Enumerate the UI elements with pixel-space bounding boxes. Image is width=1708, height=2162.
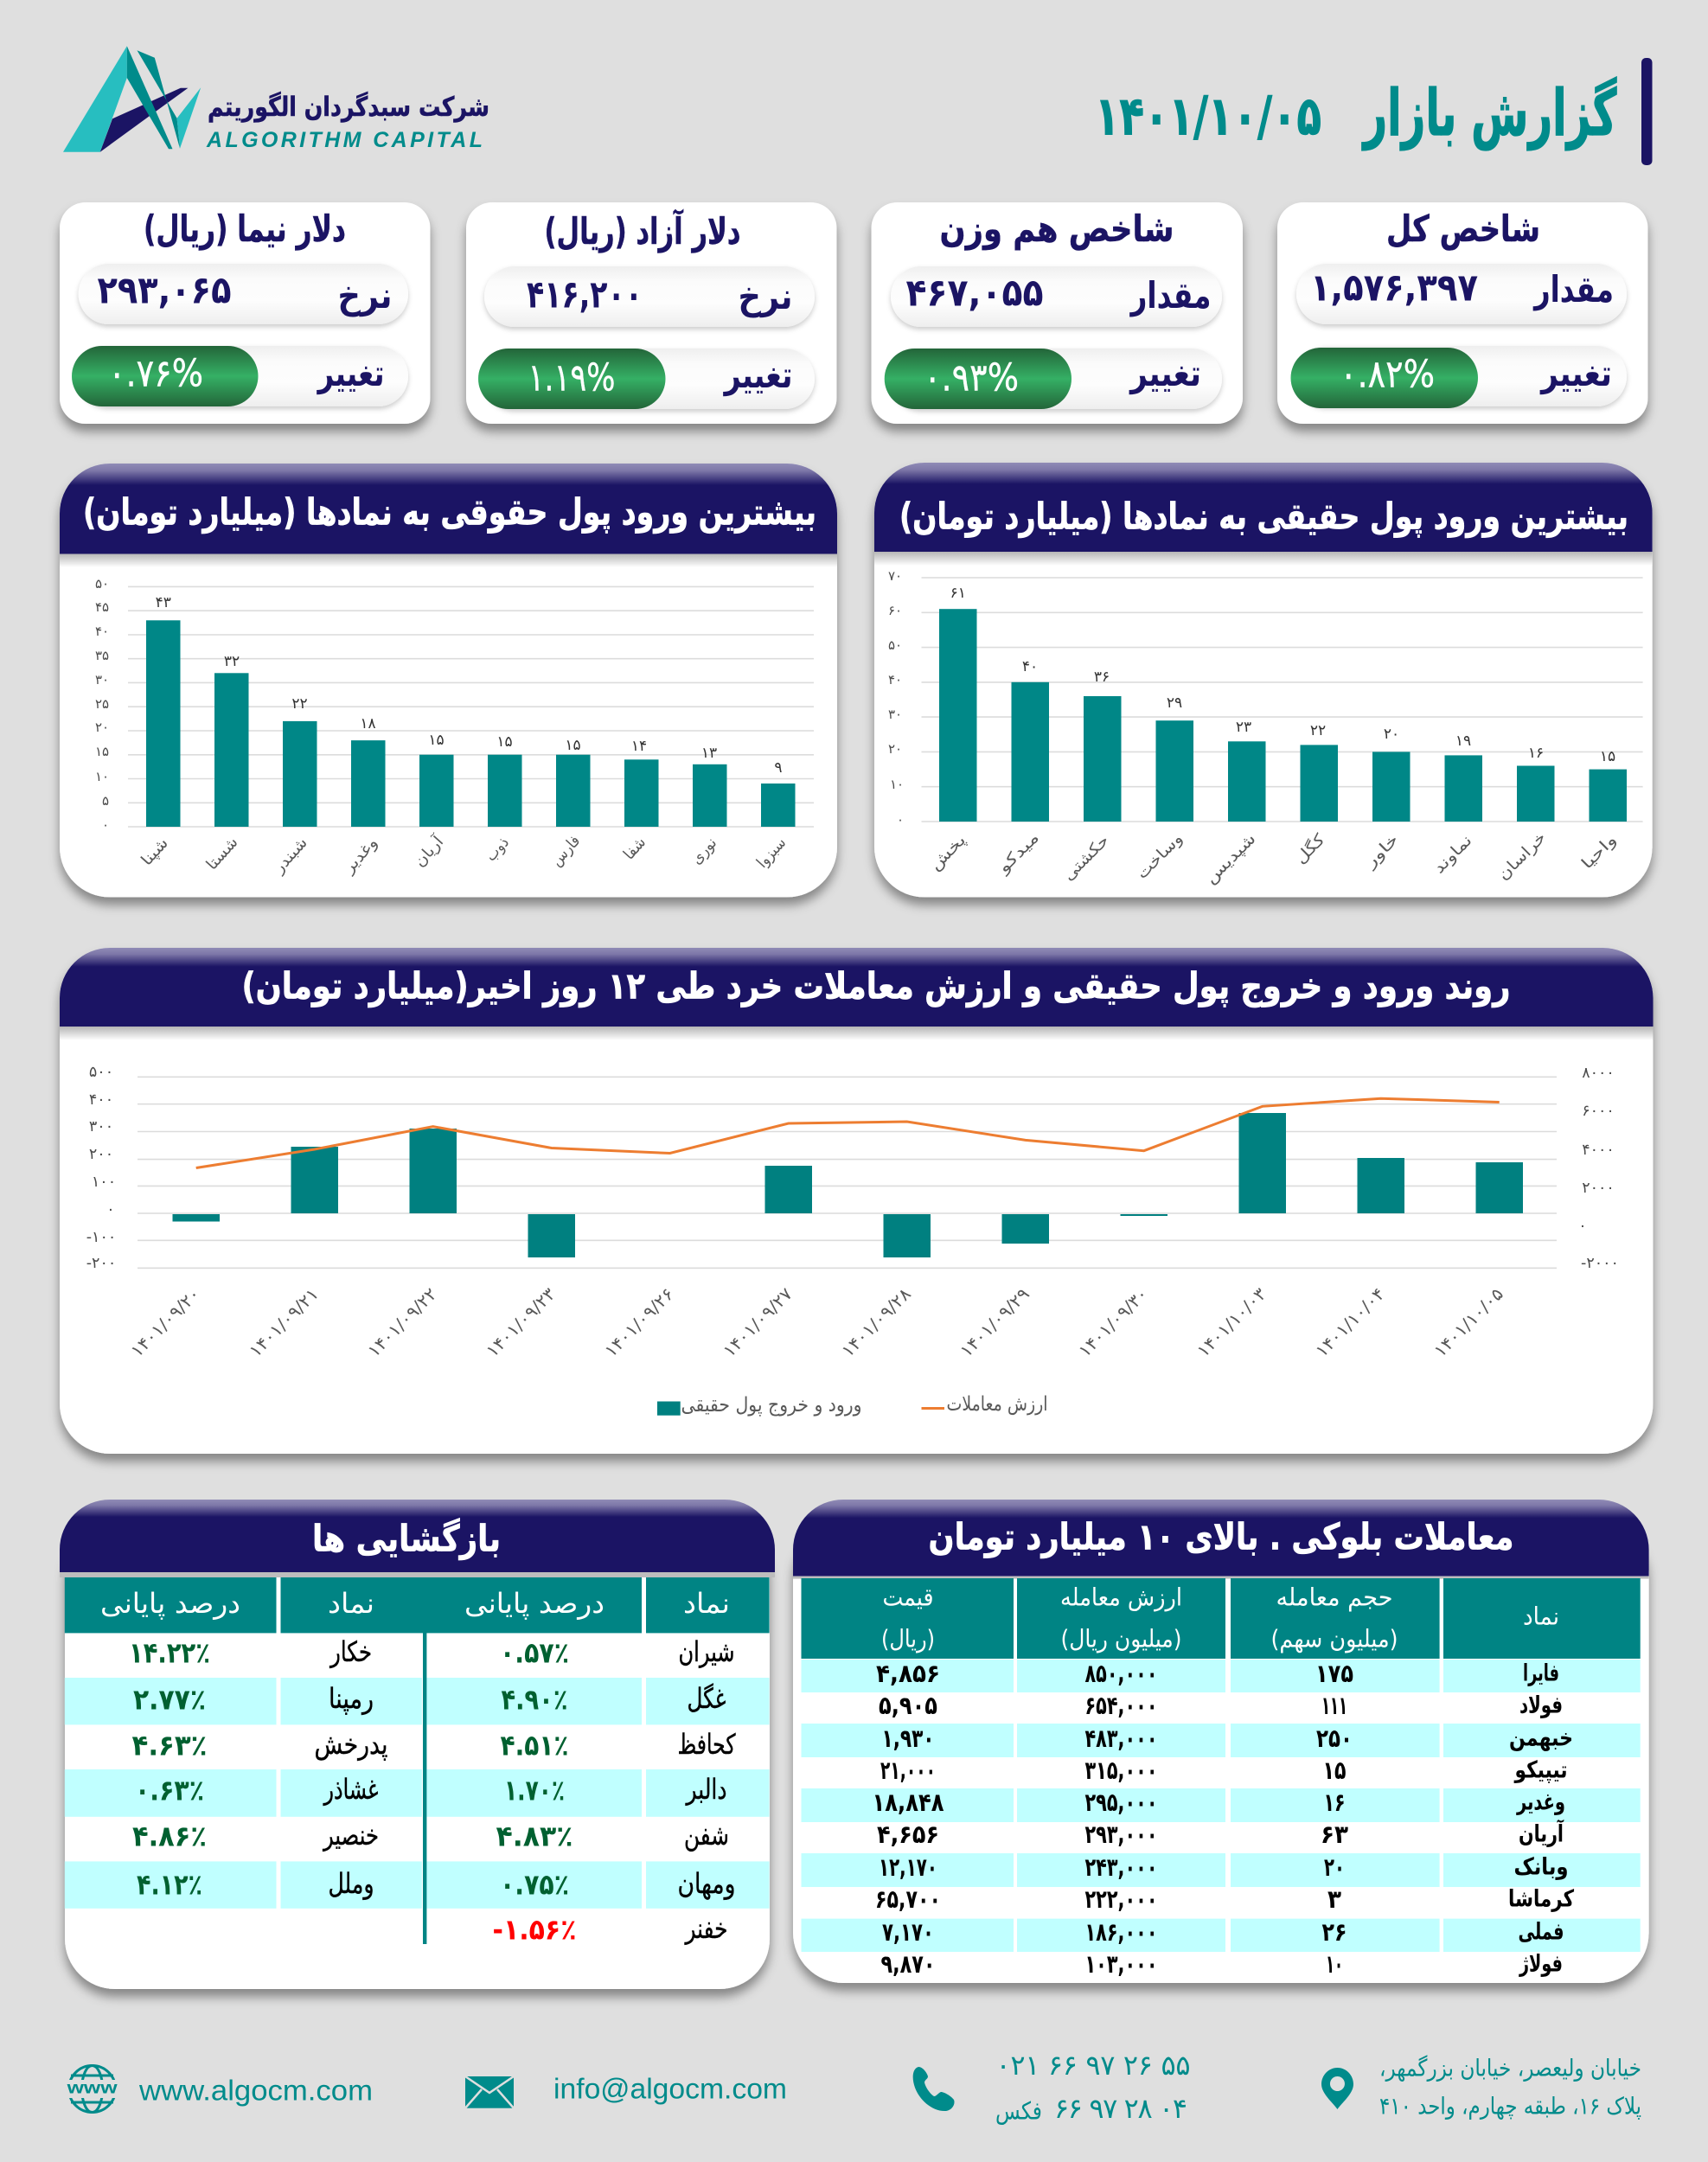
footer: phone and fax: ۶۶ ۹۷ ۲۸ ۰۴ — [1054, 2092, 1187, 2125]
left axis labels: ۵۰۰ — [89, 1064, 113, 1081]
table rows: رمپنا — [329, 1682, 374, 1715]
table header: (میلیون ریال) — [1060, 1624, 1181, 1653]
date labels: ۱۴۰۱/۰۹/۲۷ — [719, 1283, 796, 1361]
x axis labels: حکشتی — [1059, 831, 1113, 885]
icon: phone — [913, 2067, 955, 2111]
table rows: ۴.۸۶٪ — [132, 1820, 207, 1852]
table rows: ۰.۷۵٪ — [500, 1868, 569, 1901]
table rows: ۲۵۰ — [1316, 1724, 1353, 1753]
table rows: شفن — [684, 1819, 729, 1852]
bars: retail money flow — [173, 1113, 1523, 1257]
table rows: خنصیر — [322, 1819, 379, 1852]
data labels: ۹ — [774, 759, 783, 777]
change row: ۰.۷۶% — [108, 351, 203, 396]
x axis labels: سبزوا — [753, 834, 790, 872]
x axis labels — [138, 831, 790, 878]
table rows: آریان — [1519, 1820, 1564, 1847]
right axis labels: -۲۰۰۰ — [1581, 1255, 1619, 1272]
left axis labels: ۴۰۰ — [89, 1091, 113, 1109]
value row — [1296, 264, 1627, 324]
right axis labels: ۴۰۰۰ — [1582, 1142, 1615, 1159]
data labels: ۱۸ — [360, 715, 376, 732]
rate row — [484, 266, 815, 327]
footer: phone and fax — [913, 2049, 1190, 2126]
table rows: ۸۵۰,۰۰۰ — [1084, 1659, 1157, 1688]
table header: قیمت — [882, 1583, 934, 1612]
panel: 12 day trend chart — [60, 948, 1654, 1454]
y axis labels: ۰ — [102, 817, 109, 833]
y axis labels — [95, 576, 109, 833]
date labels: ۱۴۰۱/۱۰/۰۵ — [1430, 1283, 1507, 1361]
x axis labels: شستا — [202, 834, 242, 873]
footer: address — [1321, 2055, 1641, 2120]
table rows: غگل — [687, 1682, 726, 1715]
table header: حجم معامله — [1276, 1583, 1392, 1612]
change row: تغییر — [1129, 352, 1201, 395]
change row — [885, 349, 1222, 409]
change row: ۰.۸۲% — [1340, 353, 1435, 396]
left axis labels: -۱۰۰ — [86, 1229, 116, 1246]
table rows: خکار — [329, 1635, 372, 1668]
table rows: ۶۵,۷۰۰ — [875, 1884, 941, 1914]
value row: مقدار — [1532, 268, 1614, 310]
data labels: ۱۵ — [428, 732, 445, 749]
x axis labels: نماوند — [1430, 831, 1476, 878]
y axis labels: ۳۰ — [95, 672, 109, 688]
table rows: فولاد — [1519, 1692, 1563, 1719]
y axis labels: ۴۵ — [95, 599, 109, 615]
table rows: ۷,۱۷۰ — [882, 1917, 934, 1947]
date labels: ۱۴۰۱/۰۹/۳۰ — [1074, 1283, 1152, 1361]
y axis labels: ۵۰ — [888, 637, 902, 653]
table rows: ۴.۱۲٪ — [137, 1868, 202, 1901]
legend: ارزش معاملات — [946, 1393, 1048, 1416]
data labels — [156, 594, 783, 777]
y axis labels: ۲۰ — [95, 720, 109, 735]
x axis labels: شبندر — [269, 834, 311, 878]
date labels: ۱۴۰۱/۰۹/۲۶ — [600, 1283, 678, 1361]
table rows: ۲۹۵,۰۰۰ — [1084, 1788, 1157, 1817]
table header: نماد — [683, 1587, 730, 1620]
table header: (ریال) — [881, 1624, 935, 1653]
rate row: نرخ — [337, 274, 393, 317]
footer: email — [465, 2072, 787, 2108]
x axis labels: خراسان — [1494, 828, 1550, 884]
table rows: ۳ — [1327, 1884, 1341, 1914]
x axis labels: پخش — [926, 831, 969, 874]
icon: map pin — [1321, 2068, 1353, 2109]
x axis labels: ذوب — [482, 834, 513, 865]
y axis labels: ۱۰ — [890, 777, 904, 792]
table rows: -۱.۵۶٪ — [493, 1913, 576, 1946]
table rows: ۲۴۳,۰۰۰ — [1084, 1852, 1157, 1882]
footer: address: پلاک ۱۶، طبقه چهارم، واحد ۴۱۰ — [1379, 2093, 1641, 2120]
table rows: ۰.۵۷٪ — [500, 1636, 569, 1669]
icon: envelope — [465, 2076, 514, 2108]
change row: ۰.۹۳% — [924, 356, 1019, 400]
table rows: ۴۸۳,۰۰۰ — [1084, 1724, 1157, 1753]
logo: شرکت سبدگردان الگوریتم — [208, 91, 489, 123]
footer: phone and fax: ۰۲۱ ۶۶ ۹۷ ۲۶ ۵۵ — [996, 2049, 1190, 2082]
table rows — [801, 1659, 1641, 1979]
change row: تغییر — [1539, 352, 1612, 395]
panel: free dollar card — [466, 202, 837, 424]
data labels: ۶۱ — [950, 585, 966, 602]
x axis labels: نوری — [688, 834, 720, 868]
table rows: ۱۰ — [1326, 1949, 1343, 1979]
y axis labels — [888, 568, 904, 828]
footer: address: خیابان ولیعصر، خیابان بزرگمهر، — [1379, 2055, 1641, 2082]
data labels: ۱۹ — [1455, 732, 1471, 750]
y axis labels: ۶۰ — [888, 603, 902, 618]
table rows: وبانک — [1513, 1854, 1569, 1880]
data labels: ۲۲ — [1310, 722, 1326, 739]
table rows: ۹,۸۷۰ — [880, 1949, 936, 1979]
logo: ALGORITHM CAPITAL — [206, 128, 483, 152]
data labels: ۳۶ — [1094, 668, 1110, 686]
table rows: ۴.۹۰٪ — [502, 1683, 567, 1716]
table rows: ۱۸۶,۰۰۰ — [1084, 1917, 1157, 1947]
y axis labels: ۲۰ — [888, 741, 902, 757]
data labels — [950, 585, 1615, 765]
value row: مقدار — [1129, 274, 1211, 317]
right axis labels: ۰ — [1578, 1218, 1587, 1235]
left axis labels: ۲۰۰ — [89, 1146, 113, 1163]
change row — [72, 346, 408, 406]
date labels: ۱۴۰۱/۰۹/۲۹ — [956, 1283, 1033, 1361]
table rows: ۴.۸۳٪ — [496, 1820, 573, 1852]
table rows: ۱۰۳,۰۰۰ — [1084, 1949, 1157, 1979]
data labels: ۱۵ — [496, 733, 513, 751]
right axis labels: ۶۰۰۰ — [1582, 1103, 1615, 1120]
rate row — [79, 264, 408, 324]
footer: website — [66, 2065, 373, 2112]
left axis labels: ۱۰۰ — [92, 1174, 116, 1191]
data labels: ۱۵ — [565, 737, 581, 754]
table header: درصد پایانی — [100, 1587, 240, 1620]
y axis labels: ۰ — [897, 812, 904, 828]
left axis labels — [86, 1064, 116, 1272]
y axis labels: ۱۵ — [95, 744, 109, 759]
table rows: ۱۷۵ — [1315, 1659, 1353, 1688]
data labels: ۲۰ — [1384, 726, 1399, 743]
table rows: ومهان — [678, 1867, 735, 1900]
heading: معاملات بلوکی . بالای ۱۰ میلیارد تومان — [929, 1515, 1513, 1558]
icon: globe — [66, 2065, 118, 2112]
footer: website: www.algocm.com — [138, 2074, 373, 2107]
table rows: ۲۰ — [1324, 1852, 1345, 1882]
table rows: ۴.۶۳٪ — [131, 1728, 208, 1762]
title: ۱۴۰۱/۱۰/۰۵ — [1095, 85, 1321, 147]
heading: دلار نیما (ریال) — [144, 208, 346, 250]
table rows: ۲۲۲,۰۰۰ — [1084, 1884, 1157, 1914]
table rows: ۱۸,۸۴۸ — [872, 1788, 944, 1817]
table rows: ۱۴.۲۲٪ — [129, 1636, 210, 1669]
table rows: ۲۶ — [1321, 1917, 1347, 1947]
date labels: ۱۴۰۱/۰۹/۲۰ — [126, 1283, 204, 1361]
table header: نماد — [328, 1587, 374, 1620]
data labels: ۱۴ — [631, 738, 647, 755]
y axis labels: ۲۵ — [95, 696, 109, 712]
date labels: ۱۴۰۱/۰۹/۲۸ — [837, 1283, 915, 1361]
panel: legal money inflow chart — [60, 464, 837, 898]
date labels: ۱۴۰۱/۰۹/۲۳ — [482, 1283, 560, 1361]
table header — [801, 1578, 1641, 1659]
data labels: ۱۳ — [701, 745, 717, 762]
table header: درصد پایانی — [464, 1587, 605, 1620]
change row: ۱.۱۹% — [528, 356, 616, 400]
legend: ورود و خروج پول حقیقی — [681, 1394, 861, 1417]
logo — [63, 46, 489, 152]
table rows: خفنر — [684, 1912, 728, 1945]
table rows: ۲.۷۷٪ — [133, 1683, 206, 1716]
table rows: ۴.۵۱٪ — [500, 1728, 569, 1762]
table rows: فایرا — [1523, 1660, 1559, 1686]
date labels: ۱۴۰۱/۱۰/۰۳ — [1193, 1283, 1270, 1361]
table header: ارزش معامله — [1060, 1583, 1182, 1612]
panel: dollar nima card — [60, 202, 431, 424]
table rows: کرماشا — [1508, 1885, 1574, 1913]
date labels: ۱۴۰۱/۱۰/۰۴ — [1311, 1283, 1389, 1361]
value row: ۱,۵۷۶,۳۹۷ — [1310, 266, 1478, 310]
data labels: ۴۰ — [1022, 658, 1038, 675]
line: trade value — [196, 1098, 1500, 1167]
footer: phone and fax: فکس — [995, 2096, 1042, 2126]
data labels: ۱۵ — [1600, 748, 1615, 765]
table rows: ۲۹۳,۰۰۰ — [1084, 1820, 1157, 1849]
table rows: فملی — [1519, 1918, 1564, 1946]
panel: reopenings table — [60, 1500, 775, 1989]
value row: ۴۶۷,۰۵۵ — [906, 272, 1043, 315]
x axis labels: شفا — [620, 834, 649, 863]
table rows: پدرخش — [315, 1728, 387, 1761]
change row — [478, 349, 815, 409]
legend — [657, 1393, 1048, 1417]
table header — [65, 1577, 770, 1633]
table rows: ۱۲,۱۷۰ — [879, 1852, 937, 1882]
title — [1095, 58, 1652, 165]
heading: بازگشایی ها — [312, 1517, 501, 1560]
change row: تغییر — [723, 354, 792, 397]
heading: شاخص کل — [1386, 208, 1540, 251]
footer: email: info@algocm.com — [553, 2072, 787, 2105]
table rows: ۱۱۱ — [1321, 1691, 1347, 1720]
table rows: خبهمن — [1509, 1724, 1573, 1752]
change row — [1290, 346, 1627, 408]
rate row: ۲۹۳,۰۶۵ — [97, 268, 232, 313]
x axis labels: واحیا — [1578, 831, 1620, 873]
x axis labels — [926, 828, 1620, 888]
table rows: کحافظ — [678, 1728, 736, 1761]
y axis labels: ۳۵ — [95, 648, 109, 663]
y axis labels: ۵ — [102, 793, 109, 809]
table rows: فولاژ — [1519, 1951, 1563, 1977]
heading: روند ورود و خروج پول حقیقی و ارزش معاملات خرد طی ۱۲ روز اخیر(میلیارد تومان) — [241, 965, 1510, 1008]
table rows: وغدیر — [1516, 1788, 1565, 1816]
right axis labels: ۸۰۰۰ — [1582, 1065, 1615, 1082]
date labels: ۱۴۰۱/۰۹/۲۲ — [363, 1283, 441, 1361]
table rows: ۱۶ — [1323, 1788, 1346, 1817]
value row — [891, 266, 1222, 327]
data labels: ۲۹ — [1167, 694, 1182, 712]
heading: شاخص هم وزن — [939, 208, 1174, 251]
panel: total index card — [1277, 202, 1648, 424]
data labels: ۴۳ — [156, 594, 171, 611]
left axis labels: ۳۰۰ — [89, 1118, 113, 1135]
table rows — [65, 1633, 770, 1946]
table rows: ۰.۶۳٪ — [135, 1773, 204, 1807]
table rows: ۳۱۵,۰۰۰ — [1084, 1756, 1157, 1785]
data labels: ۱۶ — [1528, 745, 1544, 762]
right axis labels — [1578, 1065, 1619, 1272]
table rows: ۶۵۴,۰۰۰ — [1084, 1691, 1157, 1720]
table rows: تیپیکو — [1513, 1757, 1567, 1783]
x axis labels: وساخت — [1133, 829, 1187, 883]
rate row: ۴۱۶,۲۰۰ — [527, 273, 643, 317]
y axis labels: ۱۰ — [95, 769, 109, 784]
table rows: ۱۵ — [1323, 1756, 1346, 1785]
data labels: ۳۲ — [224, 653, 240, 670]
table rows: وملل — [329, 1867, 374, 1900]
table rows: شیران — [678, 1635, 735, 1668]
y axis labels: ۳۰ — [888, 707, 902, 722]
table rows: ۶۳ — [1321, 1820, 1348, 1849]
table header: نماد — [1523, 1602, 1559, 1631]
table rows: ۴,۶۵۶ — [877, 1820, 939, 1849]
table rows: ۵,۹۰۵ — [879, 1691, 937, 1720]
left axis labels: -۲۰۰ — [86, 1255, 116, 1272]
x axis labels: فارس — [547, 832, 584, 870]
x axis labels: آریان — [409, 831, 448, 871]
x axis labels: شپنا — [138, 835, 172, 869]
bar chart — [939, 609, 1627, 822]
table rows: ۱.۷۰٪ — [504, 1773, 565, 1807]
rate row: نرخ — [739, 275, 792, 318]
x axis labels: شپدیس — [1201, 829, 1260, 888]
left axis labels: ۰ — [106, 1201, 115, 1219]
icon: globe: www — [66, 2079, 118, 2098]
panel: block trades table — [793, 1500, 1649, 1983]
table rows: دالبر — [685, 1773, 726, 1806]
panel: equal weight index card — [872, 202, 1243, 424]
x axis labels: کگل — [1291, 829, 1329, 868]
right axis labels: ۲۰۰۰ — [1582, 1180, 1615, 1197]
table rows: ۴,۸۵۶ — [876, 1659, 940, 1688]
y axis labels: ۴۰ — [888, 672, 902, 688]
heading: دلار آزاد (ریال) — [545, 209, 740, 253]
x axis labels: خاور — [1360, 830, 1403, 873]
table rows: غشاذر — [323, 1773, 379, 1806]
change row: تغییر — [317, 352, 384, 395]
bar chart — [146, 620, 796, 827]
x axis labels: میدکو — [994, 828, 1043, 878]
heading: بیشترین ورود پول حقوقی به نمادها (میلیارد تومان) — [83, 491, 816, 534]
date labels — [126, 1283, 1507, 1361]
x axis labels: وغدیر — [339, 834, 381, 878]
date labels: ۱۴۰۱/۰۹/۲۱ — [245, 1283, 323, 1361]
table rows: ۱,۹۳۰ — [882, 1724, 934, 1753]
table header: (میلیون سهم) — [1271, 1624, 1398, 1653]
panel: retail money inflow chart — [874, 463, 1653, 898]
y axis labels: ۵۰ — [95, 576, 109, 592]
table rows: ۲۱,۰۰۰ — [880, 1756, 936, 1785]
data labels: ۲۳ — [1236, 719, 1251, 736]
y axis labels: ۴۰ — [95, 624, 109, 639]
data labels: ۲۲ — [291, 695, 308, 713]
y axis labels: ۷۰ — [888, 568, 902, 584]
